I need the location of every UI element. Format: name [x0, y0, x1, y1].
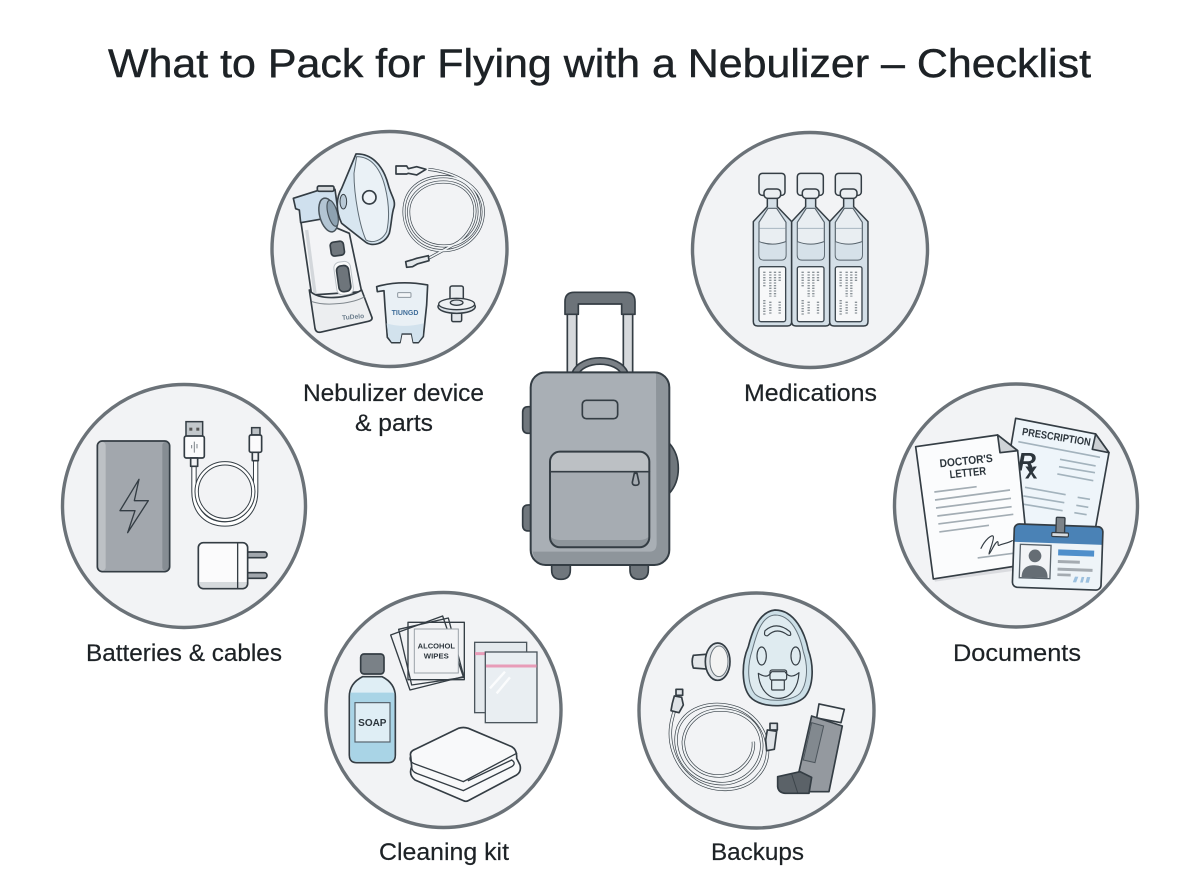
circle: backups background — [639, 593, 874, 828]
panel: backups — [639, 593, 874, 866]
icon: soap, alcohol wipes, bags and towel: SOAP — [358, 718, 387, 729]
panel: cleaning kit — [326, 592, 561, 866]
icon: soap, alcohol wipes, bags and towel: WIPES — [424, 651, 449, 660]
circle: nebulizer background — [272, 132, 507, 366]
circle: batteries background — [62, 384, 306, 628]
icon: prescription, doctor's letter and ID card: R — [1018, 449, 1037, 477]
icon: soap, alcohol wipes, bags and towel: ALCOHOL — [418, 642, 455, 651]
title: What to Pack for Flying with a Nebulizer – Checklist — [108, 42, 1091, 86]
label: cleaning kit: Cleaning kit — [379, 839, 509, 866]
wheels and bumpers — [523, 407, 678, 579]
icon: prescription, doctor's letter and ID card: x — [1025, 458, 1038, 483]
panel: documents — [894, 384, 1138, 667]
panel: medications — [692, 132, 928, 407]
telescopic handle — [565, 292, 635, 373]
label: batteries and cables: Batteries & cables — [86, 640, 282, 667]
circle: documents background — [894, 384, 1138, 627]
label: nebulizer device and parts — [303, 380, 484, 437]
icon: handheld nebulizer with mask and tube: TIUNGD — [392, 310, 418, 317]
circle: medications background — [692, 132, 928, 368]
icon: prescription, doctor's letter and ID card — [916, 418, 1109, 590]
label: documents: Documents — [953, 640, 1081, 667]
icon: handheld nebulizer with mask and tube: TuDelo — [342, 313, 364, 322]
panel: nebulizer device and parts — [272, 132, 507, 437]
icon: prescription, doctor's letter and ID card: DOCTOR'S — [939, 453, 994, 470]
icon: handheld nebulizer with mask and tube — [293, 154, 483, 343]
icon: soap, alcohol wipes, bags and towel — [349, 616, 537, 801]
panel: batteries and cables — [62, 384, 306, 667]
label: backups: Backups — [711, 839, 804, 866]
icon: prescription, doctor's letter and ID card: PRESCRIPTION — [1021, 426, 1092, 449]
icon: spare filter, mask, tubing and inhaler — [670, 610, 844, 793]
label: nebulizer device and parts: & parts — [355, 410, 433, 437]
suitcase body — [531, 372, 669, 565]
label: medications: Medications — [744, 380, 877, 407]
circle: cleaning kit background — [326, 592, 561, 828]
icon: prescription, doctor's letter and ID card: LETTER — [949, 466, 987, 481]
icon: power bank, cable and wall charger — [97, 422, 267, 589]
label: nebulizer device and parts: Nebulizer device — [303, 380, 484, 407]
icon: three medication vials — [753, 173, 868, 326]
icon: central suitcase — [523, 292, 678, 579]
